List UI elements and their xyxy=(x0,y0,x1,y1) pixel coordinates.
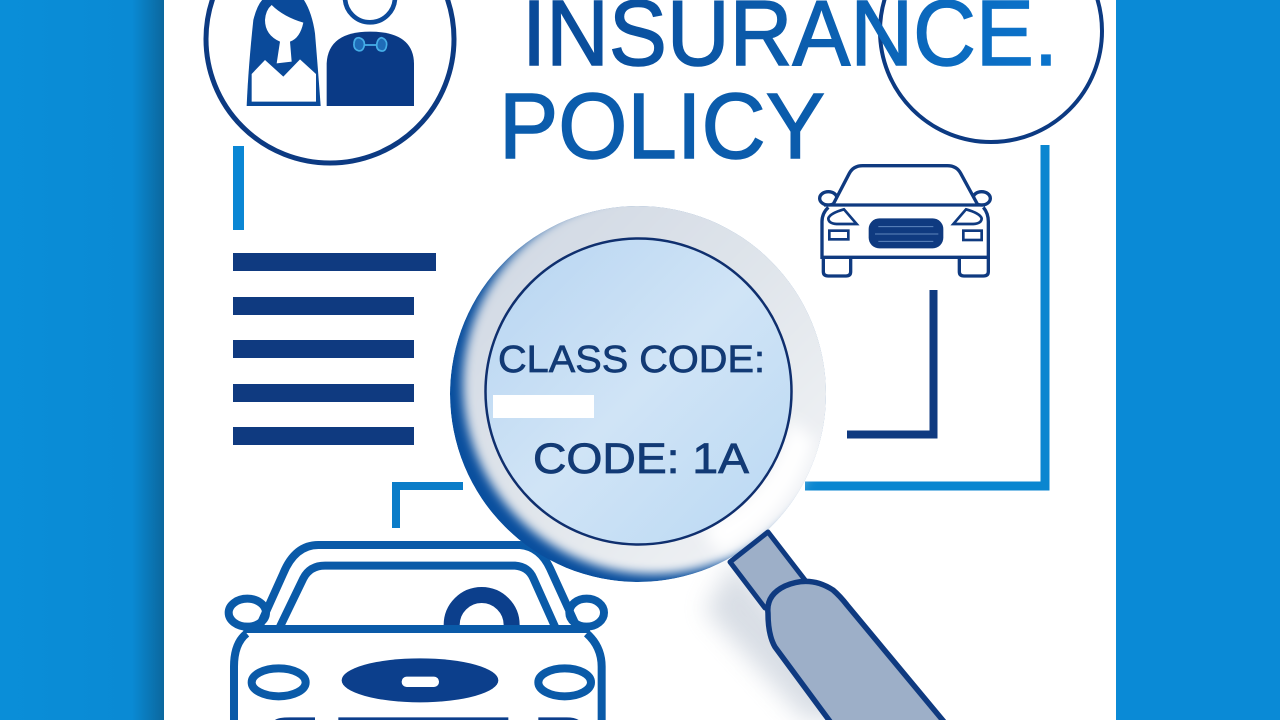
blue background left xyxy=(0,0,165,720)
lower left blue bracket xyxy=(396,486,463,528)
handle neck xyxy=(730,532,805,608)
rim highlight xyxy=(700,420,815,555)
left blue accent line xyxy=(233,146,244,230)
icon: couple in circle xyxy=(206,0,454,163)
icon: woman xyxy=(247,0,321,106)
handle grip xyxy=(768,581,955,720)
circle outline xyxy=(206,0,454,163)
text lines list xyxy=(233,253,436,445)
title: policy: POLICY xyxy=(499,74,825,178)
document page xyxy=(164,0,1116,720)
blue background right xyxy=(1115,0,1280,720)
handle shadow xyxy=(705,560,860,720)
icon: man xyxy=(327,0,414,106)
dark bracket xyxy=(847,290,934,434)
lens glass xyxy=(486,238,792,544)
icon: right circle xyxy=(880,0,1102,142)
white redaction bar xyxy=(493,395,594,418)
magnifying glass xyxy=(450,194,955,720)
icon: large car xyxy=(229,545,604,720)
icon: small car xyxy=(820,166,990,276)
lens text: code value: CODE: 1A xyxy=(533,435,749,483)
lens rim xyxy=(450,194,843,582)
right blue bracket xyxy=(805,145,1045,486)
lens text: class code: CLASS CODE: xyxy=(498,339,765,381)
